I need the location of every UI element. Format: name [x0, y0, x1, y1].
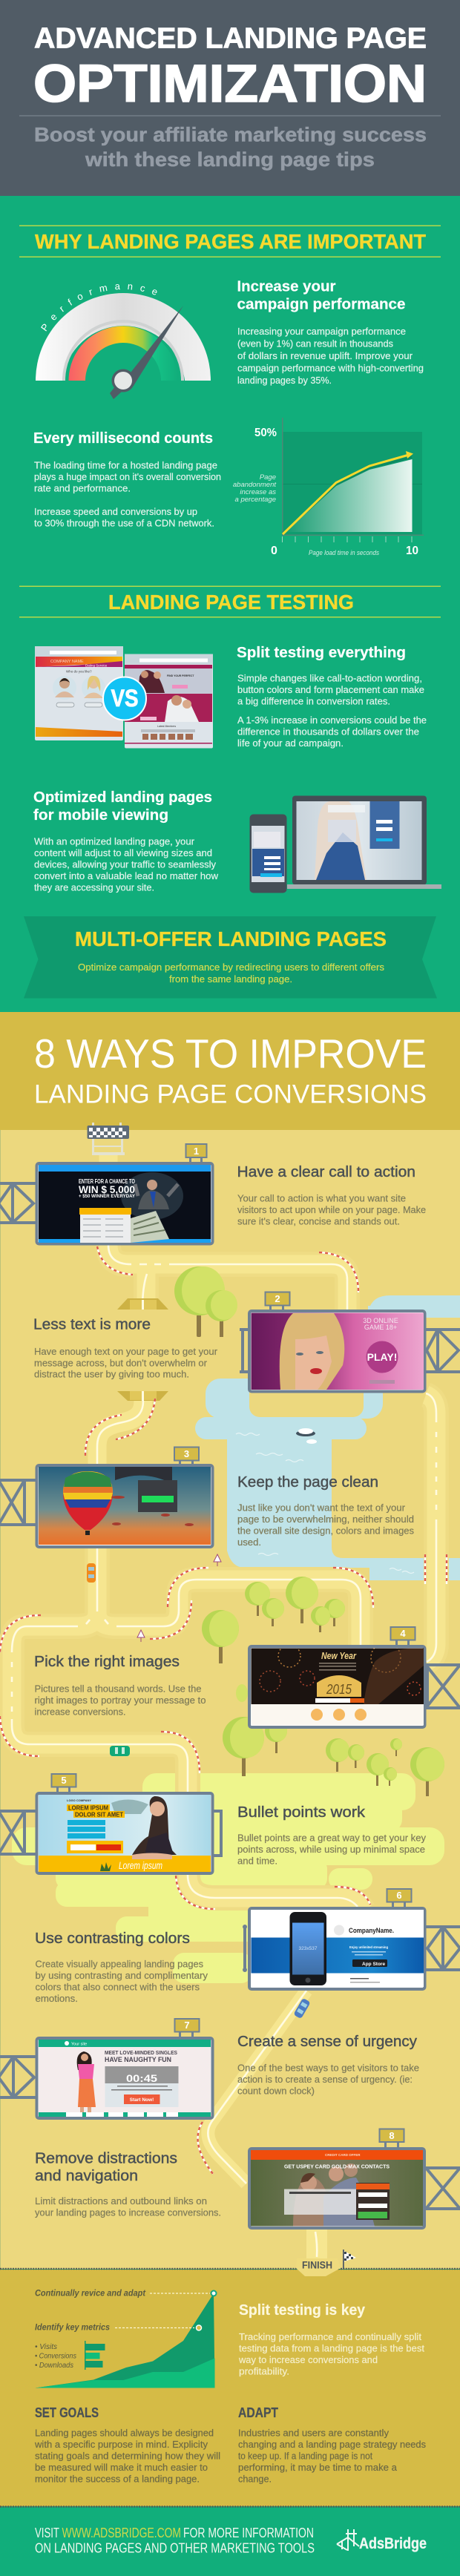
laptop	[287, 795, 441, 889]
left browser window: COMPANY NAME	[50, 660, 84, 664]
gauge: performance	[36, 284, 211, 399]
phone	[249, 815, 286, 893]
text: pick the right images: Pick the right images	[34, 1654, 180, 1670]
number tag 4	[390, 1627, 415, 1645]
text: every millisecond counts: to 30% through the use of a CDN network.	[34, 518, 214, 528]
header panel	[0, 0, 460, 196]
text: use contrasting colors: by using contrasting and complimentary	[36, 1970, 208, 1981]
text: keep the page clean: Keep the page clean	[237, 1474, 378, 1491]
text: adapt: change.	[238, 2474, 272, 2484]
text: every millisecond counts: The loading time for a hosted landing page	[34, 460, 217, 470]
card 7: countdown	[0, 2019, 212, 2118]
footer call to action: FOR MORE INFORMATION	[183, 2525, 314, 2540]
area chart: optimization process: • Conversions	[35, 2352, 76, 2361]
screenshot 7: Your site	[71, 2042, 87, 2046]
text: remove distractions and navigation: your landing pages to increase conversions.	[35, 2207, 221, 2218]
text: use contrasting colors: colors that also connect with the users	[36, 1981, 200, 1993]
adsbridge logo	[337, 2529, 427, 2552]
line chart: page abandonment: Page load time in seconds	[309, 549, 379, 557]
screenshot 5: DOLOR SIT AMET	[75, 1812, 123, 1818]
screenshot 8	[251, 2150, 423, 2226]
right browser window: Latest Members	[157, 725, 176, 728]
text: optimized landing pages for mobile	[33, 789, 219, 893]
car: green	[110, 1746, 130, 1756]
text: bullet points work	[237, 1804, 426, 1867]
ribbon: multi-offer landing pages: from the same landing page.	[169, 973, 292, 985]
text: keep the page clean: page to be overwhelming, neither should	[237, 1514, 414, 1525]
right browser window	[125, 654, 213, 748]
finish marker	[296, 2250, 356, 2276]
screenshot 6: App Store	[362, 1962, 385, 1967]
road: card 6 to card 8	[198, 1991, 306, 2184]
water	[195, 1295, 460, 1580]
line chart: page abandonment: Page	[260, 473, 276, 482]
text: split testing is key: way to increase conversions and	[238, 2354, 378, 2365]
number tag 8	[380, 2129, 404, 2147]
tree group bottom	[223, 1684, 444, 1796]
text: create a sense of urgency: Create a sense of urgency	[237, 2034, 417, 2050]
card 8: contacts	[249, 2129, 460, 2228]
subtitle: Boost your affiliate marketing success	[34, 123, 427, 145]
left browser window	[35, 646, 123, 740]
text: every millisecond counts: rate and performance.	[34, 482, 131, 494]
footer call to action: ON LANDING PAGES AND OTHER MARKETING TOOLS	[35, 2540, 315, 2555]
text: every millisecond counts	[33, 430, 221, 528]
text: increase your campaign performance: (even by 1%) can result in thousands	[237, 338, 393, 349]
number tag 5	[52, 1774, 76, 1792]
subtitle: with these landing page tips	[85, 148, 375, 171]
number tag 6	[387, 1889, 411, 1907]
number tag 6: 6	[396, 1890, 402, 1901]
text: increase your campaign performance: campaign performance with high-converting	[237, 362, 424, 374]
text: split testing everything: difference in thousands of dollars over the	[237, 726, 419, 737]
text: increase your campaign performance: campaign performance	[237, 297, 405, 313]
card 4: new year	[249, 1627, 460, 1727]
text: set goals: with a specific purpose in mind. Explicity	[34, 2439, 208, 2450]
car: orange	[87, 1563, 96, 1583]
screenshot 7: 00:45	[126, 2072, 157, 2084]
text: create a sense of urgency	[237, 2034, 419, 2097]
number tag 2: 2	[275, 1293, 280, 1304]
text: create a sense of urgency: count down clock)	[237, 2085, 315, 2097]
screenshot 4	[251, 1649, 424, 1726]
title line 1: ADVANCED LANDING PAGE	[34, 22, 427, 55]
text: set goals: stating goals and determining how they will	[35, 2450, 220, 2462]
number tag 1	[185, 1144, 206, 1162]
number tag 7: 7	[184, 2020, 190, 2031]
line chart: page abandonment: 10	[406, 545, 418, 557]
screenshot 1: + $50 WINNER EVERYDAY	[79, 1194, 136, 1199]
text: create a sense of urgency: One of the best ways to get visitors to take	[237, 2063, 419, 2073]
area chart: optimization process	[35, 2288, 217, 2388]
text: set goals	[34, 2405, 220, 2484]
car: blue	[293, 1998, 311, 2019]
text: optimized landing pages for mobile: devices, allowing your traffic to seamlessly	[34, 859, 216, 870]
screenshot 4: New Year	[321, 1650, 357, 1661]
bridge right	[426, 2168, 460, 2209]
text: use contrasting colors: Create visually appealing landing pages	[36, 1959, 203, 1969]
text: set goals: be measured will make it much easier to	[35, 2462, 208, 2473]
text: have a clear call to action: sure it's clear, concise and stands out.	[237, 1215, 400, 1227]
vs badge	[103, 677, 146, 720]
text: remove distractions and navigation: Limit distractions and outbound links on	[35, 2195, 207, 2207]
text: split testing everything: life of your ad campaign.	[237, 737, 344, 749]
text: pick the right images: Pictures tell a thousand words. Use the	[34, 1683, 202, 1695]
screenshot 7: MEET LOVE-MINDED SINGLES	[105, 2051, 177, 2056]
road signs	[137, 1554, 221, 1642]
text: have a clear call to action: Have a clear call to action	[237, 1164, 415, 1180]
screenshot 6: CompanyName.	[349, 1927, 394, 1935]
text: use contrasting colors: emotions.	[36, 1993, 78, 2004]
ribbon: multi-offer landing pages: Optimize campaign performance by redirecting users to different offers	[78, 962, 385, 973]
line chart: page abandonment: abandonment	[233, 481, 276, 489]
screenshot 2: GAME 18+	[364, 1324, 397, 1331]
road: card 8 to finish	[306, 2230, 327, 2261]
card 6: phone	[243, 1889, 460, 1989]
text: bullet points work: points across, while using up minimal space	[237, 1844, 425, 1855]
finish flag	[343, 2250, 356, 2270]
text: optimized landing pages for mobile: convert into a valuable lead no matter how	[34, 870, 219, 881]
screenshot 5	[39, 1795, 211, 1872]
text: increase your campaign performance: Increase your	[237, 279, 336, 295]
screenshot 2	[251, 1313, 424, 1390]
text: increase your campaign performance: landing pages by 35%.	[237, 375, 332, 386]
bridge left	[0, 1811, 223, 1856]
bridge left	[0, 1183, 36, 1223]
text: keep the page clean: used.	[237, 1537, 261, 1548]
line chart: page abandonment	[233, 418, 424, 557]
text: create a sense of urgency: action is to create a sense of urgency. (ie:	[237, 2074, 413, 2085]
text: split testing everything: a big difference in conversion rates.	[237, 696, 390, 706]
number tag 1: 1	[194, 1146, 199, 1157]
text: keep the page clean: the overall site design, colors and images	[237, 1525, 414, 1536]
screenshot 1: ENTER FOR A CHANCE TO	[79, 1178, 135, 1185]
header panel: 8 ways	[0, 1012, 460, 1130]
finish marker: FINISH	[302, 2258, 332, 2270]
screenshot 8: CREDIT CARD OFFER	[325, 2153, 361, 2157]
screenshot 1: WIN $ 5,000	[79, 1183, 135, 1195]
text: set goals: monitor the success of a landing page.	[35, 2474, 200, 2484]
road: card 5 to card 6	[176, 1875, 370, 1910]
screenshot 2: 3D ONLINE	[363, 1317, 398, 1324]
footer call to action: VISIT	[35, 2525, 59, 2540]
left browser window: Who do you like?	[66, 669, 92, 674]
text: keep the page clean	[237, 1474, 414, 1548]
bridge left	[0, 1480, 36, 1525]
text: split testing everything	[237, 645, 427, 749]
text: remove distractions and navigation	[35, 2150, 221, 2218]
text: every millisecond counts: Increase speed and conversions by up	[34, 506, 197, 517]
bridge left	[0, 2057, 36, 2097]
mini bar chart	[85, 2341, 105, 2370]
text: split testing everything: A 1-3% increase in conversions could be the	[237, 714, 427, 726]
screenshot 5: Lorem ipsum	[119, 1859, 162, 1871]
text: adapt: changing and a landing page strategy needs	[238, 2439, 426, 2450]
screenshot 5: LOGO COMPANY	[67, 1798, 91, 1802]
title line 2: OPTIMIZATION	[33, 55, 427, 114]
grass patches	[12, 1773, 444, 1983]
road: start to card 2 with branch	[97, 1154, 358, 1310]
screenshot 6: Enjoy unlimited streaming	[349, 1945, 388, 1949]
text: remove distractions and navigation: Remove distractions	[35, 2150, 177, 2166]
start banner	[88, 1123, 129, 1155]
line chart: page abandonment: 50%	[254, 427, 277, 439]
text: increase your campaign performance	[237, 279, 424, 386]
text: set goals: SET GOALS	[35, 2405, 99, 2420]
text: less text is more	[33, 1316, 218, 1380]
text: optimized landing pages for mobile: Optimized landing pages	[33, 789, 212, 806]
text: less text is more: message across, but don't overwhelm or	[34, 1358, 208, 1368]
card 5: bullet points	[0, 1774, 223, 1873]
text: bullet points work: and time.	[237, 1855, 277, 1867]
text: optimized landing pages for mobile: for mobile viewing	[33, 807, 168, 824]
ribbon: multi-offer landing pages: MULTI-OFFER LANDING PAGES	[75, 927, 387, 950]
text: optimized landing pages for mobile: content will adjust to all viewing sizes and	[34, 847, 212, 858]
text: optimized landing pages for mobile: they are accessing your site.	[34, 881, 154, 893]
road: tunnel to card 3	[85, 1399, 155, 1464]
screenshot 5: LOREM IPSUM	[68, 1804, 108, 1812]
screenshot 7: HAVE NAUGHTY FUN	[105, 2056, 171, 2063]
text: bullet points work: Bullet points are a great way to get your key	[237, 1833, 426, 1843]
road network	[0, 1154, 447, 2261]
left browser window: Dating Service	[85, 663, 108, 668]
text: split testing everything: button colors and form placement can make	[237, 684, 424, 695]
area chart: optimization process: Identify key metrics	[35, 2322, 110, 2333]
text: split testing is key: Tracking performance and continually split	[239, 2331, 421, 2342]
area chart: optimization process: Continually revice and adapt	[35, 2288, 146, 2299]
screenshot 4: 2015	[326, 1682, 352, 1697]
header panel: 8 ways: LANDING PAGE CONVERSIONS	[34, 1080, 427, 1108]
text: adapt	[238, 2405, 426, 2484]
trees	[174, 1266, 444, 1796]
dotted divider bottom	[0, 2506, 460, 2508]
screenshot 6	[251, 1910, 424, 1987]
dotted divider top	[0, 2268, 460, 2270]
footer call to action: WWW.ADSBRIDGE.COM	[62, 2525, 181, 2540]
bridge right	[426, 1665, 460, 1708]
text: split testing is key: Split testing is key	[239, 2302, 366, 2319]
text: less text is more: Have enough text on your page to get your	[34, 1346, 218, 1357]
line chart: page abandonment: 0	[271, 545, 277, 557]
text: every millisecond counts: plays a huge impact on it's overall conversion	[34, 471, 221, 482]
screenshot 6: 323x537	[299, 1946, 318, 1951]
header panel: 8 ways: 8 WAYS TO IMPROVE	[34, 1031, 427, 1077]
text: adapt: ADAPT	[238, 2405, 278, 2420]
text: remove distractions and navigation: and navigation	[35, 2168, 138, 2184]
text: pick the right images	[34, 1654, 206, 1717]
text: pick the right images: right images to portray your message to	[34, 1695, 206, 1706]
tree group top	[174, 1266, 237, 1337]
text: have a clear call to action: visitors to act upon while on your page. Make	[237, 1204, 426, 1215]
tunnels	[117, 1298, 168, 1401]
right browser window: FIND YOUR PERFECT	[167, 674, 194, 677]
tree group middle	[202, 1577, 345, 1663]
heading: landing page testing: LANDING PAGE TESTING	[108, 591, 354, 614]
number tag 7	[175, 2019, 199, 2037]
number tag 3: 3	[184, 1448, 189, 1459]
screenshot 3	[39, 1467, 211, 1545]
line chart: page abandonment: a percentage	[235, 496, 276, 504]
number tag 3	[174, 1447, 199, 1465]
bridges	[240, 1330, 460, 1372]
split test illustration	[35, 646, 213, 748]
road section background	[0, 1130, 460, 2269]
text: split testing everything: Split testing everything	[237, 645, 406, 661]
vs badge: VS	[111, 685, 138, 712]
text: bullet points work: Bullet points work	[237, 1804, 366, 1821]
adsbridge logo: AdsBridge	[359, 2535, 427, 2552]
card 1: clear call to action	[0, 1144, 212, 1243]
footer panel	[0, 2508, 460, 2576]
area chart: optimization process: • Downloads	[35, 2362, 73, 2370]
screenshot 7: Start Now!	[130, 2097, 154, 2103]
heading: why landing pages are important: WHY LANDING PAGES ARE IMPORTANT	[35, 230, 426, 253]
number tag 8: 8	[389, 2130, 395, 2141]
text: pick the right images: increase conversions.	[34, 1706, 126, 1717]
screenshot 8: GET USPEY CARD GOLD-MAX CONTACTS	[284, 2163, 390, 2169]
number tag 4: 4	[400, 1628, 406, 1639]
text: less text is more: Less text is more	[33, 1316, 151, 1333]
number tag 2	[266, 1292, 289, 1310]
lower panel background	[0, 2270, 460, 2506]
road: card 2 to card 4	[425, 1393, 447, 1662]
subtitle	[34, 123, 427, 171]
card 2: play game	[240, 1292, 460, 1392]
screenshot 1	[39, 1165, 211, 1243]
text: optimized landing pages for mobile: With an optimized landing page, your	[34, 835, 195, 847]
ribbon: multi-offer landing pages	[24, 916, 437, 999]
text: use contrasting colors: Use contrasting colors	[35, 1931, 190, 1947]
text: keep the page clean: Just like you don't want the text of your	[237, 1502, 406, 1514]
text: less text is more: distract the user by giving too much.	[34, 1368, 189, 1380]
text: increase your campaign performance: of dollars in revenue uplift. Improve your	[237, 350, 413, 361]
gauge label: Performance	[41, 284, 157, 331]
text: adapt: performing, it may be time to make a	[238, 2462, 398, 2473]
screenshot 7	[39, 2040, 211, 2117]
text: every millisecond counts: Every millisecond counts	[33, 430, 213, 447]
boats	[296, 1428, 317, 1444]
text: split testing everything: Simple changes like call-to-action wording,	[237, 672, 422, 684]
screenshot 2: PLAY!	[367, 1351, 397, 1363]
text: split testing is key	[238, 2302, 424, 2377]
text: split testing is key: profitability.	[239, 2365, 289, 2377]
text: have a clear call to action	[237, 1164, 426, 1227]
cars and road signs	[87, 1554, 311, 2019]
bridges	[245, 1927, 460, 1970]
text: have a clear call to action: Your call to action is what you want site	[237, 1193, 406, 1203]
devices illustration	[249, 795, 441, 893]
text: adapt: Industries and users are constantly	[238, 2428, 390, 2438]
text: adapt: to keep up. If a landing page is not	[238, 2450, 372, 2462]
area chart: optimization process: • Visits	[35, 2343, 57, 2351]
text: use contrasting colors	[35, 1931, 208, 2004]
card 3: balloon	[0, 1447, 212, 1547]
green section background	[0, 196, 460, 1012]
text: set goals: Landing pages should always be designed	[35, 2428, 214, 2438]
text: split testing is key: testing data from a landing page is the best	[239, 2343, 424, 2353]
number tag 5: 5	[61, 1775, 67, 1786]
footer call to action	[35, 2525, 315, 2555]
road: card 3 junction and loops	[0, 1548, 373, 1792]
water ripples	[236, 1433, 414, 1573]
line chart: page abandonment: increase as	[240, 488, 276, 496]
text: increase your campaign performance: Increasing your campaign performance	[237, 326, 406, 337]
